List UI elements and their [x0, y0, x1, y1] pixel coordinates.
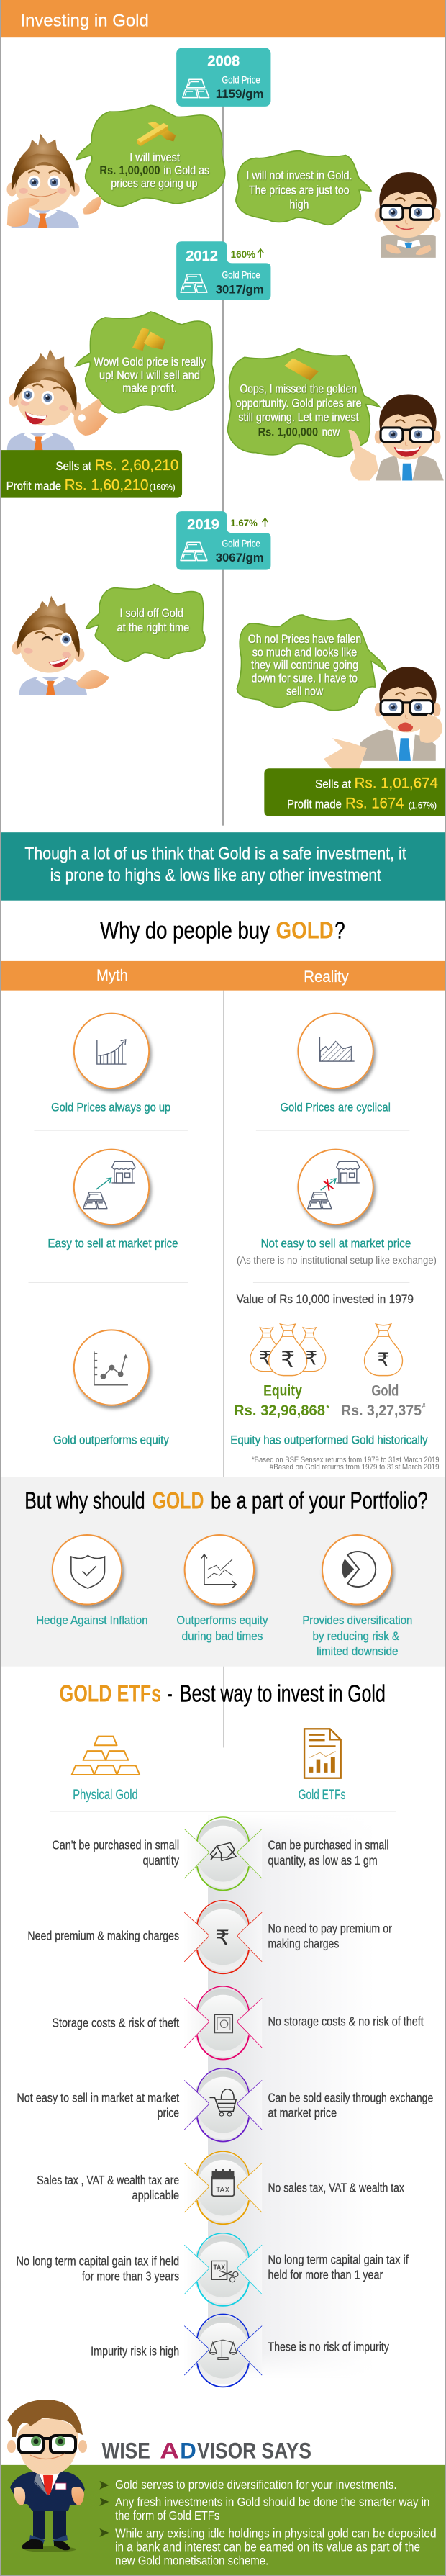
gold value: Gold: [371, 1382, 399, 1399]
row 5: taxes: Sales tax , VAT & wealth tax are: [37, 2173, 179, 2187]
header band: Investing in Gold: [1, 0, 445, 37]
teal message band: is prone to highs & lows like any other investment: [50, 866, 381, 885]
heading: gold etfs: GOLD ETFs: [60, 1680, 161, 1707]
advice text: the form of Gold ETFs: [115, 2508, 219, 2523]
row 4: selling: [17, 2068, 433, 2141]
row 5: taxes: [37, 2151, 404, 2224]
row 4: selling: Not easy to sell in market at market: [17, 2091, 180, 2104]
year card 2019: [176, 511, 270, 570]
year card 2012: 160%: [231, 249, 255, 261]
section: why do people buy gold: [1, 917, 445, 1747]
reality 3 text: Equity has outperformed Gold historically: [230, 1434, 429, 1447]
equity value: [234, 1382, 330, 1419]
speech bubble: investor 2 in 2019: Oh no! Prices have fallen: [248, 633, 361, 646]
money bag: gold: [365, 1324, 403, 1376]
money bags: equity: ₹: [281, 1347, 295, 1372]
row 4: selling: at market price: [268, 2106, 337, 2120]
money bags: equity: ₹: [259, 1348, 271, 1369]
row 1: quantity: Can't be purchased in small: [52, 1838, 179, 1852]
text: outperforms equity: [177, 1614, 268, 1643]
row 3: storage: [52, 1986, 424, 2059]
row 6: capital gains: for more than 3 years: [82, 2269, 179, 2283]
column headings: [73, 1788, 345, 1803]
reality 1 icon: cyclical chart: [298, 1014, 373, 1089]
column headings: Gold ETFs: [299, 1788, 345, 1803]
speech bubble: investor 2 in 2012: Rs. 1,00,000: [258, 425, 318, 438]
year card 2019: Gold Price: [222, 539, 260, 549]
icon: pie chart: [322, 1535, 391, 1605]
speech bubble: investor 1 in 2012: up! Now I will sell and: [99, 369, 200, 382]
row 7: impurity: These is no risk of impurity: [268, 2340, 389, 2354]
row 1: quantity: quantity: [142, 1853, 180, 1868]
wise advisor says logo: A: [160, 2438, 179, 2464]
year card 2019: 3067/gm: [216, 551, 264, 564]
teal message band: Though a lot of us think that Gold is a safe investment, it: [24, 845, 406, 863]
equity value: *: [327, 1404, 330, 1413]
myth 2 icon: gold to shop: [74, 1150, 149, 1225]
row 4: selling: price: [158, 2106, 179, 2120]
text: outperforms equity: during bad times: [182, 1630, 263, 1643]
year card 2008: 2008: [207, 53, 240, 70]
panels above the comparison table: [0, 0, 445, 1778]
row 6: capital gains: TAX: [214, 2264, 225, 2271]
speech bubble: investor 1 in 2008: prices are going up: [111, 177, 197, 190]
row 2: premium: No need to pay premium or: [268, 1922, 392, 1935]
row 5: taxes: applicable: [132, 2188, 179, 2202]
row 2: premium: [27, 1901, 392, 1973]
icon: shield: [53, 1535, 122, 1605]
year card 2012: 3017/gm: [216, 283, 264, 296]
advice text: [115, 2477, 437, 2567]
wise advisor says logo: [102, 2438, 311, 2464]
text: hedge against inflation: Hedge Against Inflation: [36, 1614, 148, 1627]
results card: investor 1 in 2012: (160%): [150, 482, 176, 492]
footer: green advice band: [1, 2438, 445, 2575]
heading: gold etfs: -: [168, 1680, 173, 1707]
row 2: premium: making charges: [268, 1937, 339, 1950]
results card: investor 2 in 2019: Sells at: [315, 778, 351, 791]
speech bubble: investor 1 in 2008: in Gold as: [163, 164, 209, 177]
gold value: Rs. 3,27,375: [341, 1402, 422, 1419]
speech bubble: investor 1 in 2012: Wow! Gold price is really: [94, 356, 206, 369]
speech bubble: investor 2 in 2019: down for sure. I have to: [252, 672, 358, 685]
myth 1 text: Gold Prices always go up: [51, 1102, 170, 1114]
year card 2012: 2012: [186, 248, 218, 264]
myth and reality header band: [1, 961, 445, 991]
value caption: Value of Rs 10,000 invested in 1979: [237, 1293, 414, 1306]
row 1: quantity: quantity, as low as 1 gm: [268, 1853, 378, 1868]
heading: But why should: [24, 1487, 145, 1514]
results card: investor 2 in 2019: [264, 768, 445, 816]
results card: investor 1 in 2012: Sells at: [56, 460, 91, 473]
heading: ?: [334, 917, 345, 944]
header band: Investing in Gold: Investing in Gold: [20, 12, 149, 30]
speech bubble: investor 2 in 2008: The prices are just too: [249, 184, 350, 197]
myth 3 text: Gold outperforms equity: [53, 1434, 170, 1447]
speech bubble: investor 2 in 2012: still growing. Let me invest: [238, 411, 359, 424]
myth and reality header band: Reality: [304, 968, 350, 986]
icon: etf document: [304, 1729, 341, 1778]
year card 2008: [176, 48, 270, 107]
icon: gold stack: [72, 1737, 140, 1775]
money bags: equity: ₹: [306, 1348, 317, 1369]
results card: investor 1 in 2012: [0, 450, 182, 498]
character: investor 2, pointing at self: [348, 395, 444, 480]
speech bubble: investor 2 in 2012: [227, 348, 380, 457]
speech bubble: investor 2 in 2019: [237, 615, 386, 711]
speech bubble: investor 1 in 2019: I sold off Gold: [119, 607, 183, 620]
footnotes: [252, 1456, 440, 1472]
heading: gold etfs: [60, 1680, 386, 1707]
year card 2019: 2019: [187, 516, 219, 533]
myth and reality header band: Myth: [96, 966, 128, 984]
speech bubble: investor 2 in 2008: high: [290, 198, 309, 211]
speech bubble: investor 2 in 2008: I will not invest in Gold.: [246, 169, 352, 182]
column headings: Physical Gold: [73, 1788, 138, 1803]
wise advisor says logo: VISOR SAYS: [197, 2438, 311, 2464]
row 2: premium: Need premium & making charges: [27, 1929, 179, 1942]
comparison table: rows 5 to 7: [1, 2151, 445, 2575]
heading: GOLD: [153, 1487, 204, 1514]
year card 2019: 1.67%: [230, 518, 258, 529]
results card: investor 1 in 2012: Rs. 1,60,210: [65, 477, 149, 494]
year card 2012: Gold Price: [222, 269, 260, 280]
reality 2 text: (As there is no institutional setup like exchange): [237, 1255, 437, 1266]
character: investor 2, arms crossed: [375, 172, 440, 258]
character: wise advisor: [7, 2400, 87, 2552]
heading: Why do people buy: [100, 917, 270, 944]
heading: [24, 1487, 428, 1514]
row 7: impurity: Impurity risk is high: [91, 2344, 179, 2358]
text: diversification: limited downside: [317, 1645, 399, 1658]
speech bubble: investor 2 in 2019: sell now: [286, 685, 323, 698]
speech bubble: investor 2 in 2012: Oops, I missed the golden: [240, 382, 357, 395]
character: investor 2, worried: [324, 667, 442, 774]
speech bubble: investor 2 in 2008: [236, 151, 371, 225]
panel: why gold in a portfolio: [1, 1477, 445, 1667]
gold value: [341, 1382, 426, 1419]
text: diversification: Provides diversification: [302, 1614, 412, 1627]
teal message band: [1, 832, 445, 901]
speech bubble: investor 2 in 2012: now: [322, 425, 340, 438]
wise advisor says logo: D: [180, 2438, 196, 2464]
gold value: #: [422, 1402, 426, 1409]
speech bubble: investor 1 in 2012: make profit.: [122, 382, 177, 395]
speech bubble: investor 1 in 2019: at the right time: [117, 621, 189, 634]
character: investor 1, delighted: [6, 344, 108, 451]
comparison table: rows 1 to 4: [17, 1788, 446, 2378]
row 6: capital gains: [17, 2233, 409, 2306]
results card: investor 1 in 2012: Profit made: [6, 480, 61, 493]
speech bubble: investor 2 in 2019: they will continue going: [251, 659, 358, 672]
bullet arrows: [99, 2481, 109, 2537]
section: myth and reality continued: [1, 1324, 445, 1778]
year card 2012: [176, 241, 270, 300]
results card: investor 2 in 2019: (1.67%): [409, 801, 437, 811]
text: outperforms equity: Outperforms equity: [177, 1614, 268, 1627]
results card: investor 2 in 2019: Rs. 1674: [345, 795, 404, 812]
year card 2008: Gold Price: [222, 74, 260, 85]
equity value: Rs. 32,96,868: [234, 1402, 325, 1419]
wise advisor says logo: WISE: [102, 2438, 150, 2464]
myth 3 icon: scatter chart: [74, 1330, 149, 1405]
row 1: quantity: [52, 1817, 389, 1890]
row 2: premium: ₹: [215, 1927, 229, 1950]
speech bubble: investor 1 in 2019: [86, 584, 205, 662]
icon: market chart: [185, 1535, 254, 1605]
results card: investor 1 in 2012: Rs. 2,60,210: [95, 456, 178, 474]
results card: investor 2 in 2019: Rs. 1,01,674: [355, 774, 438, 791]
row 7: impurity: [91, 2314, 389, 2387]
row 6: capital gains: No long term capital gain tax if held: [17, 2254, 179, 2268]
text: diversification: by reducing risk &: [313, 1630, 399, 1643]
row 1: quantity: Can be purchased in small: [268, 1838, 389, 1852]
speech bubble: investor 1 in 2008: Rs. 1,00,000: [99, 164, 160, 177]
reality 1 text: Gold Prices are cyclical: [280, 1102, 391, 1114]
results card: investor 2 in 2019: Profit made: [287, 798, 342, 811]
speech bubble: investor 1 in 2012: [76, 312, 214, 413]
advice text: new Gold monetisation scheme.: [115, 2554, 268, 2567]
reality 2 text: Not easy to sell at market price: [261, 1238, 411, 1251]
money bags: equity: [250, 1324, 326, 1376]
myth 2 text: Easy to sell at market price: [47, 1238, 178, 1251]
row 5: taxes: TAX: [216, 2185, 229, 2194]
speech bubble: investor 2 in 2019: so much and looks like: [252, 646, 357, 659]
speech bubble: investor 2 in 2012: opportunity. Gold prices are: [236, 397, 362, 410]
reality 2 icon: blocked gold to shop: [298, 1150, 373, 1225]
speech bubble: investor 1 in 2008: [76, 105, 225, 207]
year card 2008: 1159/gm: [216, 88, 264, 101]
text: diversification: [302, 1614, 412, 1658]
row 6: capital gains: held for more than 1 year: [268, 2268, 383, 2282]
character: investor 1, winking: [10, 593, 109, 695]
heading: GOLD: [276, 917, 334, 944]
equity value: Equity: [263, 1382, 302, 1399]
speech bubble: investor 1 in 2008: I will invest: [129, 151, 180, 164]
myth 1 icon: rising chart: [74, 1014, 149, 1089]
comparison backdrop: [208, 1815, 446, 2378]
money bag: gold: ₹: [377, 1349, 390, 1371]
row 3: storage: Storage costs & risk of theft: [52, 2016, 180, 2030]
reality 2 text: [237, 1238, 437, 1266]
timeline centre line: [222, 105, 224, 826]
character: investor 1, thinking: [6, 134, 101, 228]
